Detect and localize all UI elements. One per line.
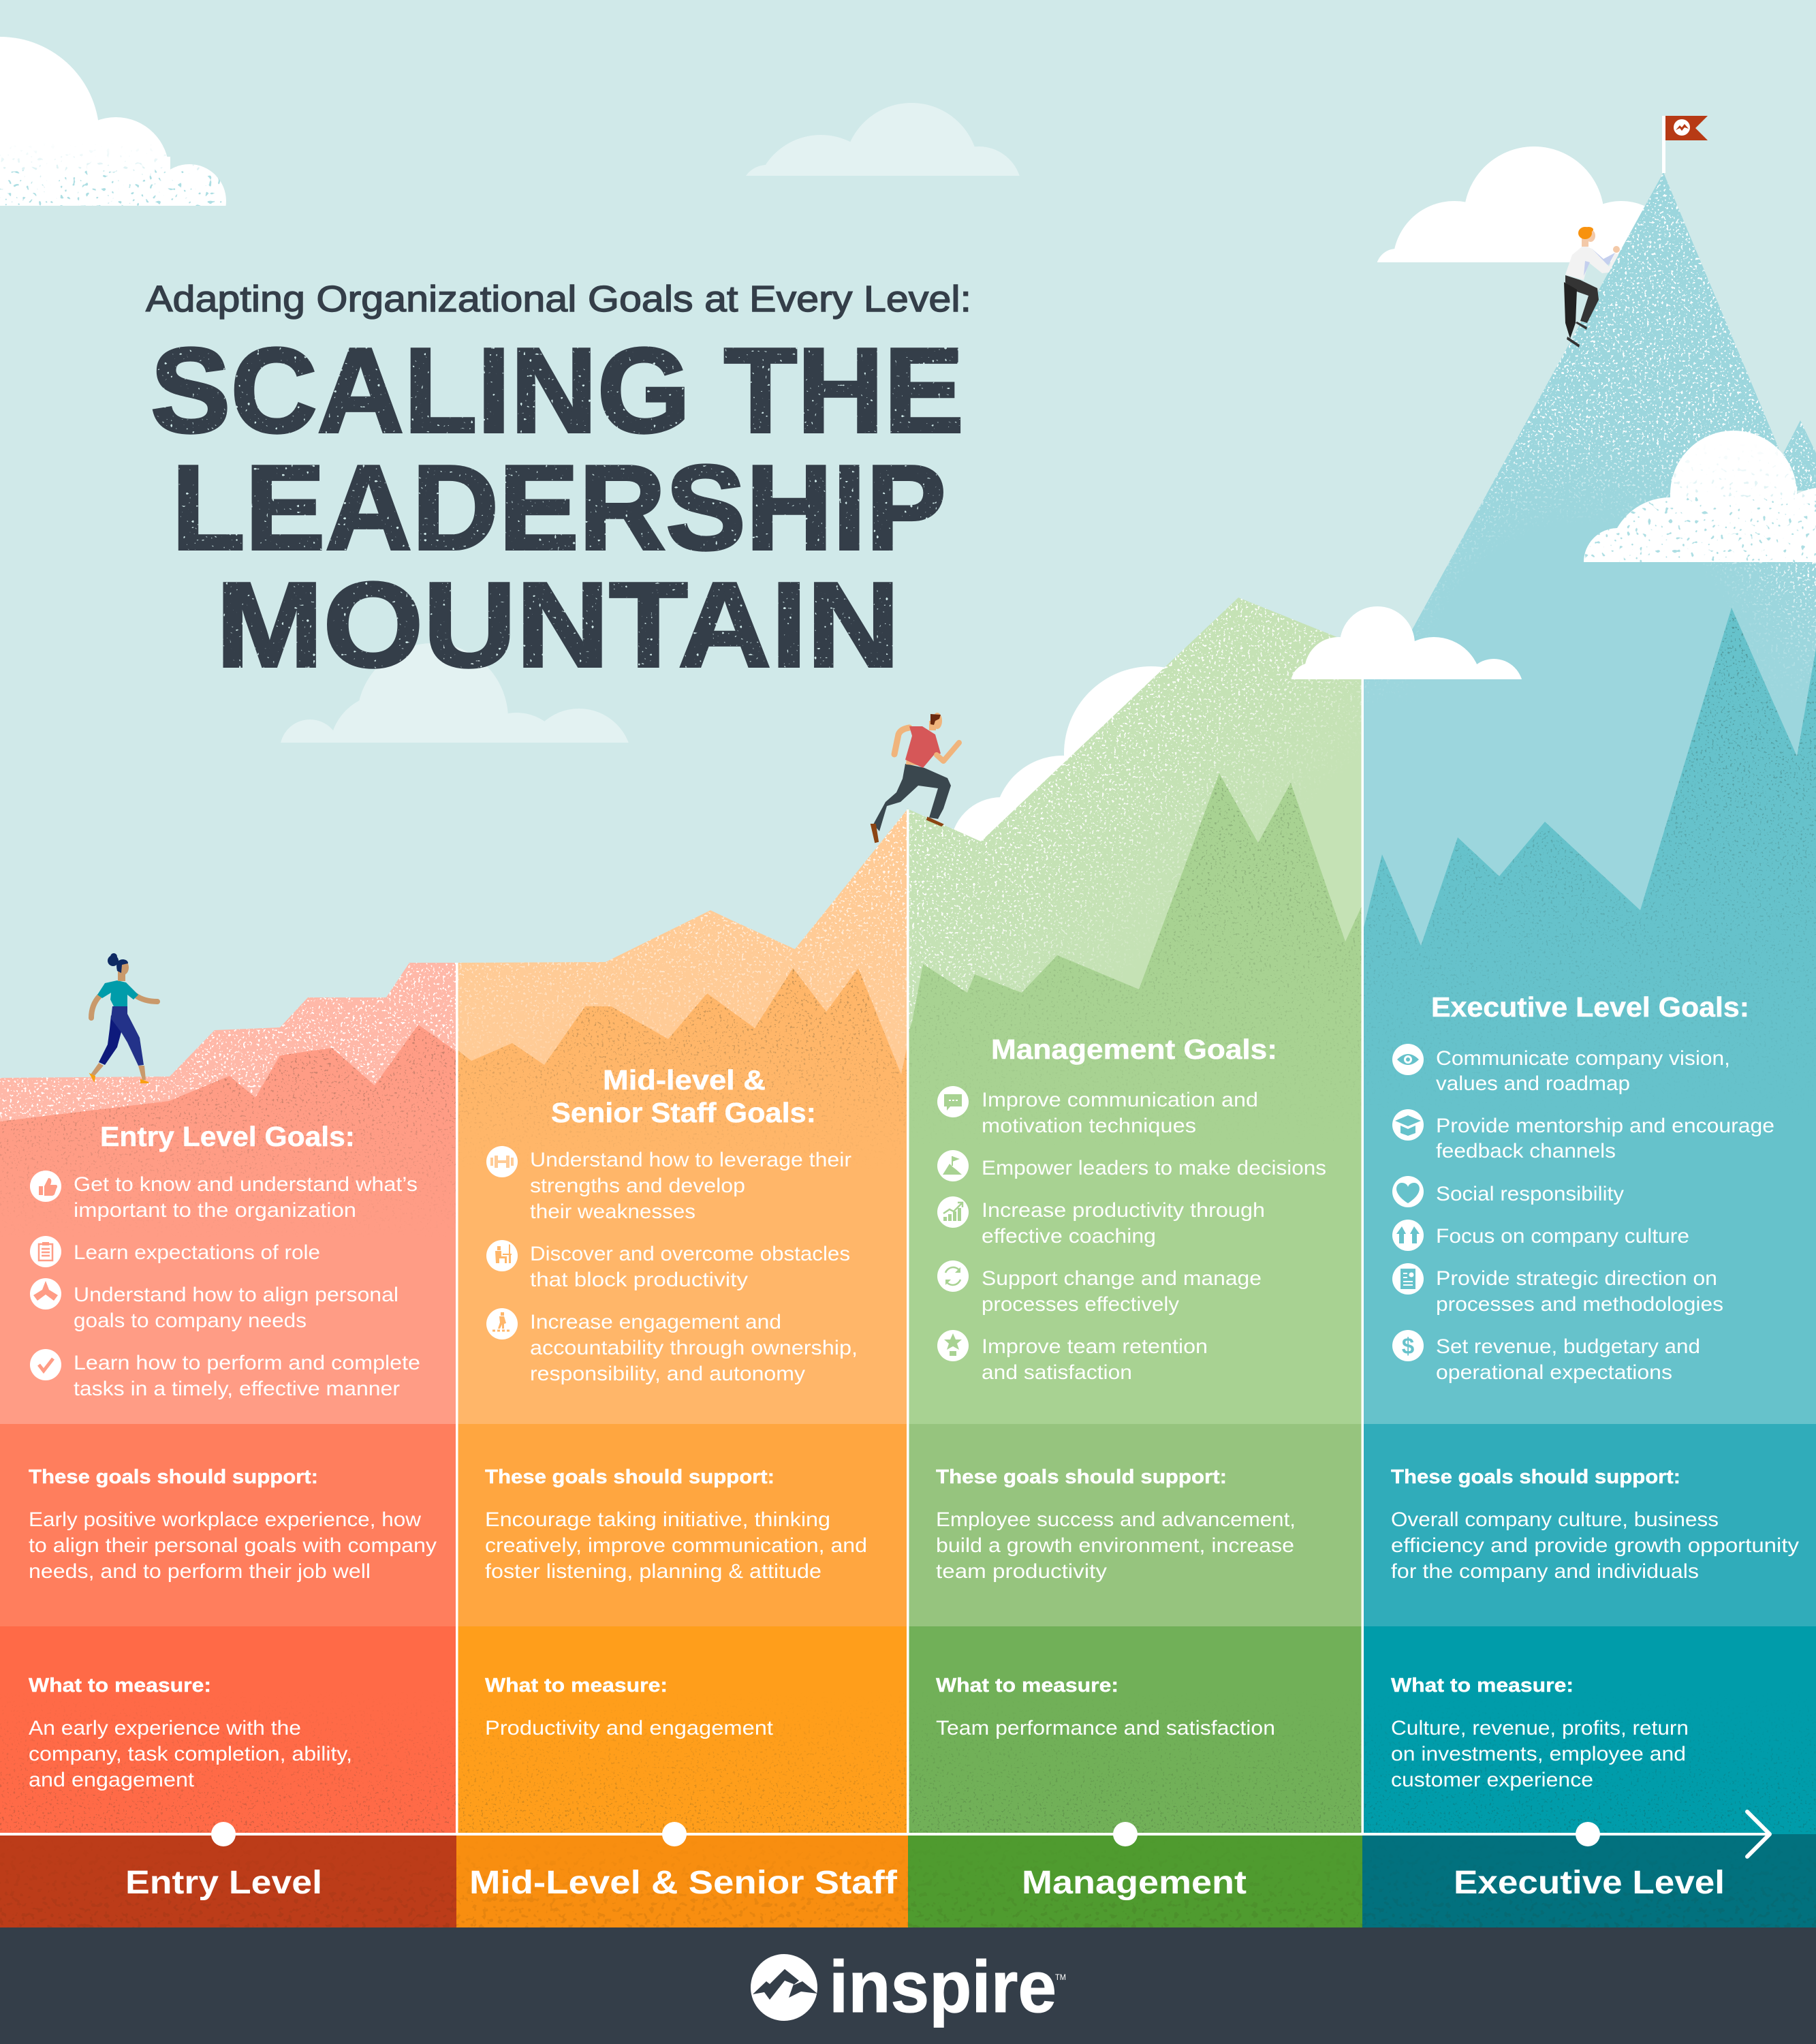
panel: executive level goals	[1392, 991, 1774, 1384]
timeline arrow with level markers	[0, 1812, 1770, 1857]
cloud: top left	[0, 37, 226, 206]
block: mid-level support text: foster listening, planning & attitude	[485, 1560, 821, 1583]
goal item with dollar icon: operational expectations	[1436, 1361, 1672, 1384]
block: management support text: team productivity	[936, 1560, 1107, 1583]
goal item with desk icon: Discover and overcome obstacles	[530, 1243, 850, 1265]
goal item with dumbbell icon	[486, 1146, 851, 1223]
goal item with mountain flag icon: Empower leaders to make decisions	[982, 1157, 1326, 1179]
goal item with star trophy icon	[937, 1330, 1208, 1384]
goal item with eye icon: Communicate company vision,	[1436, 1047, 1730, 1070]
block: mid-level support text: Encourage taking initiative, thinking	[485, 1508, 830, 1531]
goal item with people icon	[1392, 1220, 1689, 1251]
block: mid-level support text	[485, 1466, 867, 1583]
block: mid-level support text: creatively, improve communication, and	[485, 1534, 867, 1557]
mountain: entry level	[0, 961, 456, 1424]
goal item with mountain flag icon	[937, 1150, 1326, 1181]
goal item with dollar icon	[1392, 1330, 1700, 1384]
goal item with graduation cap icon: Provide mentorship and encourage	[1436, 1115, 1774, 1137]
level labels: Entry Level	[125, 1865, 322, 1901]
cloud: behind summit	[1377, 146, 1645, 262]
panel: level label backgrounds	[0, 1834, 1816, 1927]
block: entry level support text: These goals should support:	[29, 1466, 318, 1488]
cloud: top centre	[746, 103, 1019, 176]
level labels: Management	[1022, 1865, 1247, 1901]
block: mid-level measure text: Productivity and engagement	[485, 1717, 774, 1739]
mountain: executive	[1362, 164, 1816, 1424]
block: management measure text: Team performance and satisfaction	[936, 1717, 1275, 1739]
icon: summit flag	[1662, 116, 1708, 173]
block: executive measure text: What to measure:	[1391, 1675, 1574, 1697]
block: executive support text: efficiency and provide growth opportunity	[1391, 1534, 1799, 1557]
block: entry level support text: to align their personal goals with company	[29, 1534, 437, 1557]
block: management support text	[936, 1466, 1296, 1583]
goal item with climbing person icon: responsibility, and autonomy	[530, 1363, 805, 1385]
goal item with thumbs-up icon: important to the organization	[74, 1199, 356, 1222]
block: entry level support text	[29, 1466, 437, 1583]
figure: climber at summit	[1564, 227, 1620, 347]
goal item with clipboard icon	[30, 1236, 320, 1267]
goal item with document icon	[1392, 1263, 1723, 1316]
goal item with cycle arrows icon: processes effectively	[982, 1293, 1179, 1316]
block: entry level measure text: and engagement	[29, 1769, 195, 1791]
goal item with heart icon	[1392, 1176, 1624, 1207]
block: mid-level support text: These goals should support:	[485, 1466, 774, 1488]
block: management support text: These goals should support:	[936, 1466, 1227, 1488]
block: management support text: Employee success and advancement,	[936, 1508, 1296, 1531]
goal item with dollar icon: Set revenue, budgetary and	[1436, 1335, 1700, 1358]
goal item with dumbbell icon: Understand how to leverage their	[530, 1149, 851, 1171]
heading: mid-level and senior staff goals	[551, 1064, 816, 1128]
block: management support text: build a growth environment, increase	[936, 1534, 1294, 1557]
panel: entry level goals	[30, 1121, 420, 1400]
goal item with heart icon: Social responsibility	[1436, 1183, 1624, 1205]
goal item with clipboard icon: Learn expectations of role	[74, 1241, 320, 1264]
level labels: Mid-Level & Senior Staff	[469, 1865, 898, 1901]
level labels	[125, 1865, 1725, 1901]
goal item with dumbbell icon: their weaknesses	[530, 1201, 695, 1223]
logo: inspire: inspire	[829, 1945, 1056, 2028]
block: executive support text: These goals should support:	[1391, 1466, 1680, 1488]
goal item with speech bubble icon: Improve communication and	[982, 1089, 1258, 1111]
goal item with eye icon: values and roadmap	[1436, 1072, 1630, 1095]
goal item with graduation cap icon	[1392, 1109, 1774, 1162]
block: entry level support text: needs, and to perform their job well	[29, 1560, 371, 1583]
heading: mid-level and senior staff goals: Senior Staff Goals:	[551, 1097, 816, 1128]
footer bar	[0, 1927, 1816, 2044]
goal item with climbing person icon: accountability through ownership,	[530, 1337, 858, 1359]
goal item with aligned-hands icon: Understand how to align personal	[74, 1284, 398, 1306]
heading: management goals: Management Goals:	[991, 1034, 1277, 1065]
column dividers	[456, 679, 1364, 1834]
figure: runner on mid-level peak	[871, 713, 959, 842]
heading: mid-level and senior staff goals: Mid-level &	[603, 1064, 766, 1096]
goal item with speech bubble icon	[937, 1086, 1258, 1137]
figure: walker on entry level	[91, 953, 157, 1083]
block: management measure text: What to measure:	[936, 1675, 1118, 1697]
block: executive measure text: Culture, revenue, profits, return	[1391, 1717, 1689, 1739]
block: management measure text	[936, 1675, 1275, 1739]
goal item with dollar icon: $	[1402, 1333, 1414, 1359]
goal item with cycle arrows icon	[937, 1260, 1262, 1316]
block: entry level measure text	[29, 1675, 352, 1791]
block: executive measure text: on investments, employee and	[1391, 1743, 1686, 1765]
goal item with check icon	[30, 1349, 420, 1400]
goal item with desk icon: that block productivity	[530, 1269, 748, 1291]
cloud: right of summit	[1580, 431, 1816, 620]
level labels: Executive Level	[1454, 1865, 1725, 1901]
goal item with cycle arrows icon: Support change and manage	[982, 1267, 1262, 1290]
title	[151, 323, 964, 692]
goal item with graduation cap icon: feedback channels	[1436, 1140, 1616, 1162]
subtitle: Adapting Organizational Goals at Every Level:	[146, 279, 971, 320]
block: executive measure text	[1391, 1675, 1689, 1791]
block: executive support text: for the company and individuals	[1391, 1560, 1699, 1583]
block: entry level measure text: What to measure:	[29, 1675, 211, 1697]
block: executive support text: Overall company culture, business	[1391, 1508, 1719, 1531]
goal item with desk icon	[486, 1240, 850, 1291]
cloud: behind title	[281, 643, 629, 743]
goal item with check icon: tasks in a timely, effective manner	[74, 1378, 400, 1400]
goal item with document icon: processes and methodologies	[1436, 1293, 1723, 1316]
title: LEADERSHIP	[172, 440, 946, 575]
panel: mid-level goals	[486, 1064, 858, 1385]
block: entry level measure text: An early experience with the	[29, 1717, 301, 1739]
goal item with document icon: Provide strategic direction on	[1436, 1267, 1717, 1290]
block: executive support text	[1391, 1466, 1799, 1583]
goal item with star trophy icon: Improve team retention	[982, 1335, 1208, 1358]
goal item with eye icon	[1392, 1044, 1730, 1095]
goal item with check icon: Learn how to perform and complete	[74, 1352, 420, 1374]
panel: support row backgrounds	[0, 1424, 1816, 1626]
block: mid-level measure text	[485, 1675, 774, 1739]
panel: measure row backgrounds	[0, 1626, 1816, 1834]
mountain: mid level	[456, 804, 909, 1424]
goal item with thumbs-up icon: Get to know and understand what’s	[74, 1173, 418, 1196]
title: SCALING THE	[151, 323, 964, 458]
cloud: behind management mountain	[950, 666, 1238, 899]
block: entry level measure text: company, task completion, ability,	[29, 1743, 352, 1765]
goal item with climbing person icon: Increase engagement and	[530, 1311, 781, 1333]
goal item with aligned-hands icon: goals to company needs	[74, 1310, 307, 1332]
goal item with growth chart icon: Increase productivity through	[982, 1199, 1265, 1222]
goal item with climbing person icon	[486, 1308, 858, 1385]
goal item with star trophy icon: and satisfaction	[982, 1361, 1132, 1384]
heading: entry level goals: Entry Level Goals:	[100, 1121, 355, 1152]
goal item with speech bubble icon: motivation techniques	[982, 1115, 1196, 1137]
mountain: management	[907, 545, 1364, 1424]
goal item with aligned-hands icon	[30, 1278, 398, 1332]
goal item with dumbbell icon: strengths and develop	[530, 1175, 745, 1197]
cloud: at management summit	[1291, 606, 1523, 732]
block: executive measure text: customer experience	[1391, 1769, 1593, 1791]
panel: management goals	[937, 1034, 1326, 1384]
goal item with thumbs-up icon	[30, 1171, 418, 1222]
block: mid-level measure text: What to measure:	[485, 1675, 668, 1697]
logo: inspire: TM	[1055, 1972, 1066, 1982]
goal item with people icon: Focus on company culture	[1436, 1225, 1689, 1248]
goal item with growth chart icon	[937, 1196, 1265, 1248]
heading: executive level goals: Executive Level Goals:	[1431, 991, 1749, 1023]
block: entry level support text: Early positive workplace experience, how	[29, 1508, 421, 1531]
title: MOUNTAIN	[216, 557, 900, 692]
goal item with growth chart icon: effective coaching	[982, 1225, 1156, 1248]
